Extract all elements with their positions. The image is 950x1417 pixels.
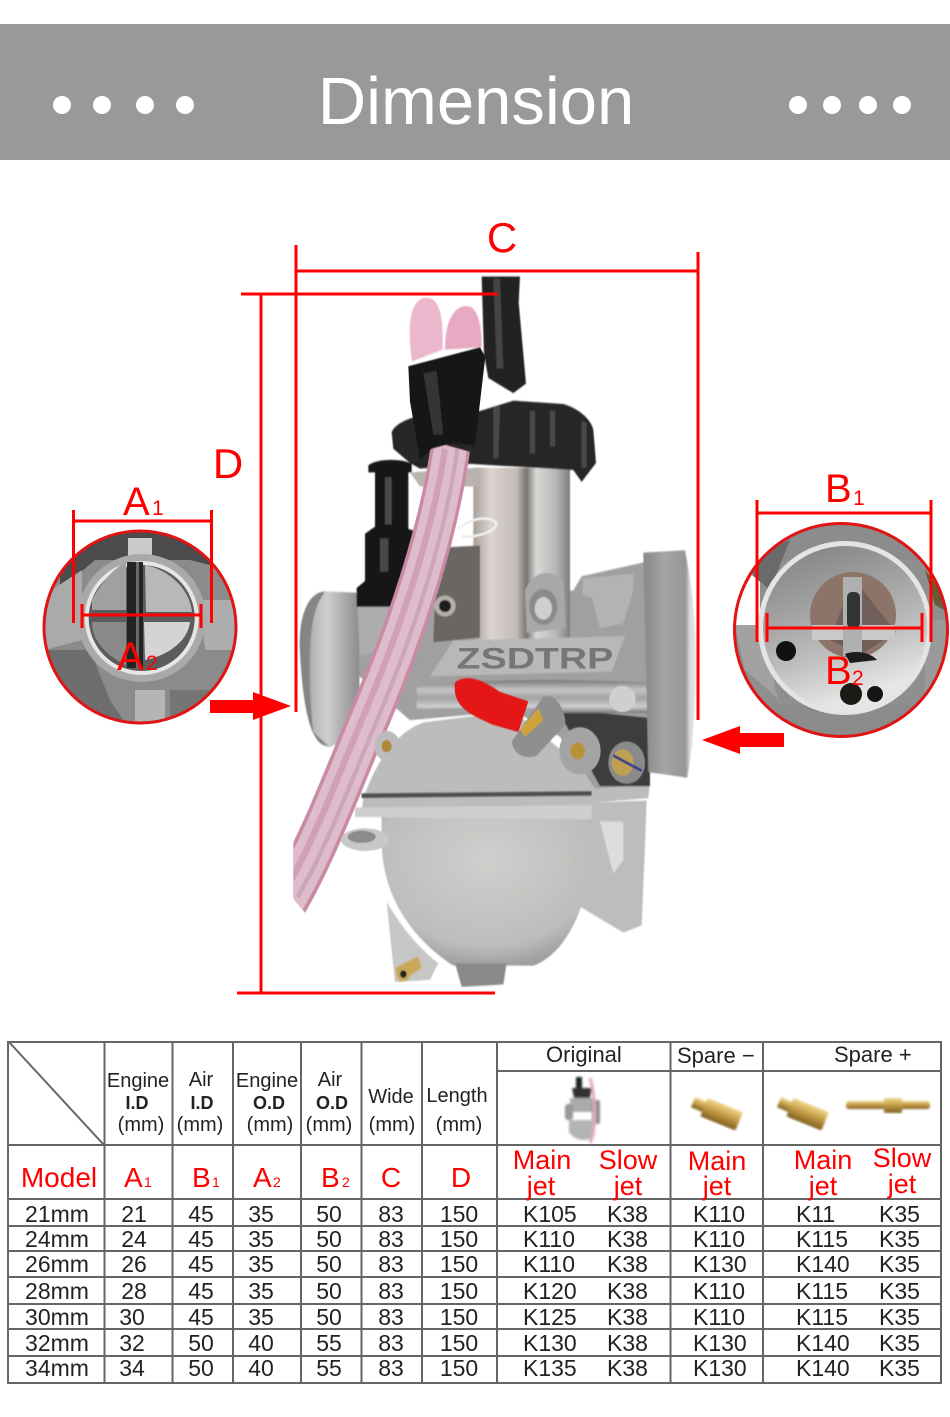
row 28mm: K115 xyxy=(796,1278,848,1304)
row 26mm xyxy=(25,1251,920,1277)
column headers: Air xyxy=(318,1069,343,1091)
row 30mm: 30mm xyxy=(25,1304,89,1330)
red model row: jet xyxy=(887,1169,917,1199)
row 30mm: K125 xyxy=(523,1304,577,1330)
icon: slow jet spare plus xyxy=(846,1098,930,1113)
B1 measure: B xyxy=(825,467,852,511)
row 26mm: 35 xyxy=(248,1251,274,1277)
column lobe xyxy=(525,573,566,633)
red model row: Slow xyxy=(599,1145,658,1175)
row 32mm: 150 xyxy=(440,1330,478,1356)
B1 measure: 1 xyxy=(853,487,865,510)
row 32mm: 32 xyxy=(119,1330,145,1356)
row 34mm xyxy=(25,1355,920,1381)
row 26mm: K140 xyxy=(796,1251,850,1277)
dimension D xyxy=(213,294,498,993)
red cap port xyxy=(512,696,565,757)
row 30mm: 35 xyxy=(248,1304,274,1330)
left arrow xyxy=(210,692,291,720)
bowl bottom nut xyxy=(455,963,507,987)
row 24mm: 50 xyxy=(316,1226,342,1252)
row 34mm: 40 xyxy=(248,1355,274,1381)
row 26mm: K110 xyxy=(523,1251,575,1277)
A2 measure xyxy=(82,604,201,679)
row 21mm: 21mm xyxy=(25,1201,89,1227)
row 26mm: K35 xyxy=(879,1251,920,1277)
row 34mm: 50 xyxy=(188,1355,214,1381)
column headers: (mm) xyxy=(247,1114,293,1136)
screw boss xyxy=(559,727,601,774)
column headers: Engine xyxy=(236,1070,298,1092)
column headers: I.D xyxy=(190,1093,214,1113)
red model row: 1 xyxy=(212,1174,220,1190)
brass nozzle xyxy=(395,956,422,982)
red model row: Main xyxy=(794,1145,852,1175)
row 34mm: K140 xyxy=(796,1355,850,1381)
row 30mm: 45 xyxy=(188,1304,214,1330)
row 28mm: 35 xyxy=(248,1278,274,1304)
row 21mm: K35 xyxy=(879,1201,920,1227)
red model row: B xyxy=(321,1162,340,1193)
table grid xyxy=(8,1041,941,1384)
jet group headers xyxy=(546,1042,912,1068)
row 24mm: K38 xyxy=(607,1226,648,1252)
row 21mm: 45 xyxy=(188,1201,214,1227)
right circle detail: air side xyxy=(730,520,950,742)
row 21mm: 50 xyxy=(316,1201,342,1227)
red model row: C xyxy=(381,1162,401,1193)
row 26mm: 26mm xyxy=(25,1251,89,1277)
row 30mm: K38 xyxy=(607,1304,648,1330)
row 28mm: 28 xyxy=(121,1278,147,1304)
row 32mm: 32mm xyxy=(25,1330,89,1356)
red model row: Slow xyxy=(873,1143,932,1173)
float bowl xyxy=(382,803,592,966)
left circle detail: engine side xyxy=(40,525,240,730)
row 30mm: 30 xyxy=(119,1304,145,1330)
row 21mm xyxy=(25,1201,920,1227)
row 24mm: 24 xyxy=(121,1226,147,1252)
row 34mm: K35 xyxy=(879,1355,920,1381)
row 32mm: K38 xyxy=(607,1330,648,1356)
row 24mm: K110 xyxy=(693,1226,745,1252)
red model row: A xyxy=(253,1162,272,1193)
pink fuel hose xyxy=(285,446,457,897)
row 34mm: 34mm xyxy=(25,1355,89,1381)
A2 measure: A xyxy=(117,635,144,679)
header banner xyxy=(0,24,950,160)
gray flange under knob xyxy=(357,607,397,656)
column headers: Length xyxy=(426,1085,488,1107)
column headers: O.D xyxy=(253,1093,285,1113)
row 34mm: 150 xyxy=(440,1355,478,1381)
B1 measure xyxy=(757,467,931,642)
red model row: Main xyxy=(513,1145,571,1175)
row 30mm xyxy=(25,1304,920,1330)
column headers: (mm) xyxy=(369,1114,415,1136)
A1 measure: A xyxy=(123,480,150,524)
icon: small carburetor xyxy=(565,1077,600,1143)
logo plate xyxy=(430,636,625,676)
row 28mm: 50 xyxy=(316,1278,342,1304)
mix screw xyxy=(608,741,645,784)
A1 measure: 1 xyxy=(152,497,164,520)
column headers: Wide xyxy=(368,1086,414,1108)
row 26mm: 83 xyxy=(378,1251,404,1277)
bowl washer xyxy=(341,828,389,851)
row 21mm: 21 xyxy=(121,1201,147,1227)
red model row: jet xyxy=(613,1171,643,1201)
column headers: O.D xyxy=(316,1093,348,1113)
row 28mm: K38 xyxy=(607,1278,648,1304)
column headers xyxy=(107,1069,488,1136)
A1 measure xyxy=(74,480,212,623)
row 28mm: K120 xyxy=(523,1278,577,1304)
logo text: ZSDTRP xyxy=(457,643,613,676)
red model row: jet xyxy=(526,1171,556,1201)
right nub xyxy=(583,574,633,628)
row 32mm: 83 xyxy=(378,1330,404,1356)
left intake xyxy=(300,591,360,747)
row 26mm: 26 xyxy=(121,1251,147,1277)
left block xyxy=(433,546,480,642)
row 26mm: 45 xyxy=(188,1251,214,1277)
right flange xyxy=(643,550,696,778)
row 21mm: K38 xyxy=(607,1201,648,1227)
red model row: 2 xyxy=(342,1174,350,1190)
right arrow xyxy=(702,726,784,754)
row 34mm: 83 xyxy=(378,1355,404,1381)
row 28mm: K35 xyxy=(879,1278,920,1304)
row 21mm: K11 xyxy=(796,1201,835,1227)
row 24mm: 35 xyxy=(248,1226,274,1252)
row 28mm: K110 xyxy=(693,1278,745,1304)
B2 measure: 2 xyxy=(852,667,864,690)
row 26mm: 150 xyxy=(440,1251,478,1277)
boss left xyxy=(375,731,400,761)
red model row: Main xyxy=(688,1146,746,1176)
row 30mm: K35 xyxy=(879,1304,920,1330)
row 24mm: 83 xyxy=(378,1226,404,1252)
red cap xyxy=(455,678,528,732)
throttle column xyxy=(473,468,570,640)
B2 measure xyxy=(767,613,922,693)
row 28mm: 150 xyxy=(440,1278,478,1304)
specification table xyxy=(8,1041,941,1384)
red model row: jet xyxy=(808,1171,838,1201)
row 21mm: K110 xyxy=(693,1201,745,1227)
right bracket xyxy=(580,800,647,933)
row 32mm: 40 xyxy=(248,1330,274,1356)
dimension C xyxy=(296,214,698,720)
row 34mm: 34 xyxy=(119,1355,145,1381)
row 26mm: K130 xyxy=(693,1251,747,1277)
row 28mm: 28mm xyxy=(25,1278,89,1304)
black cap xyxy=(392,401,596,482)
red model row: 1 xyxy=(144,1174,152,1190)
bowl lower lug xyxy=(387,902,438,982)
row 30mm: K115 xyxy=(796,1304,848,1330)
A2 measure: 2 xyxy=(146,652,158,675)
row 30mm: 50 xyxy=(316,1304,342,1330)
row 32mm xyxy=(25,1330,920,1356)
row 24mm: K35 xyxy=(879,1226,920,1252)
row 34mm: K135 xyxy=(523,1355,577,1381)
right banner dots xyxy=(789,96,911,114)
column headers: (mm) xyxy=(306,1114,352,1136)
row 32mm: 50 xyxy=(188,1330,214,1356)
column headers: Engine xyxy=(107,1070,169,1092)
plug xyxy=(609,686,636,712)
pink tube ends xyxy=(410,298,443,361)
row 32mm: 55 xyxy=(316,1330,342,1356)
red model row: D xyxy=(451,1162,471,1193)
left banner dots xyxy=(53,96,194,114)
row 32mm: K130 xyxy=(693,1330,747,1356)
dimension D: D xyxy=(213,440,243,487)
row 21mm: 150 xyxy=(440,1201,478,1227)
row 24mm xyxy=(25,1226,920,1252)
dimension C: C xyxy=(487,214,517,261)
row 21mm: 83 xyxy=(378,1201,404,1227)
banner title: Dimension xyxy=(318,64,634,139)
column headers: (mm) xyxy=(436,1114,482,1136)
red model row: B xyxy=(192,1162,211,1193)
row 24mm: K110 xyxy=(523,1226,575,1252)
row 32mm: K140 xyxy=(796,1330,850,1356)
row 26mm: 50 xyxy=(316,1251,342,1277)
row 24mm: 24mm xyxy=(25,1226,89,1252)
black boot xyxy=(408,347,485,459)
row 32mm: K35 xyxy=(879,1330,920,1356)
row 26mm: K38 xyxy=(607,1251,648,1277)
column headers: Air xyxy=(189,1069,214,1091)
row 24mm: 45 xyxy=(188,1226,214,1252)
main body xyxy=(357,562,650,789)
column headers: (mm) xyxy=(177,1114,223,1136)
row 28mm xyxy=(25,1278,920,1304)
icon: main jet spare minus xyxy=(689,1093,743,1131)
clip ring xyxy=(458,518,497,537)
bowl cover xyxy=(362,711,650,812)
jet group headers: Spare + xyxy=(834,1042,912,1067)
row 30mm: K110 xyxy=(693,1304,745,1330)
row 24mm: K115 xyxy=(796,1226,848,1252)
red model row: jet xyxy=(702,1171,732,1201)
black knob xyxy=(357,460,417,607)
carburetor illustration xyxy=(285,277,696,987)
row 21mm: 35 xyxy=(248,1201,274,1227)
row 34mm: K38 xyxy=(607,1355,648,1381)
row 34mm: K130 xyxy=(693,1355,747,1381)
red model row xyxy=(21,1143,932,1201)
row 28mm: 83 xyxy=(378,1278,404,1304)
jet group headers: Original xyxy=(546,1042,622,1067)
row 28mm: 45 xyxy=(188,1278,214,1304)
column headers: I.D xyxy=(125,1093,149,1113)
top nipple xyxy=(482,277,526,393)
jet group headers: Spare − xyxy=(677,1043,755,1068)
row 34mm: 55 xyxy=(316,1355,342,1381)
column headers: (mm) xyxy=(118,1114,164,1136)
red model row: 2 xyxy=(273,1174,281,1190)
row 21mm: K105 xyxy=(523,1201,577,1227)
row 24mm: 150 xyxy=(440,1226,478,1252)
red model row: Model xyxy=(21,1162,97,1193)
red model row: A xyxy=(124,1162,143,1193)
row 32mm: K130 xyxy=(523,1330,577,1356)
icon: main jet spare plus xyxy=(775,1093,829,1131)
row 30mm: 83 xyxy=(378,1304,404,1330)
row 30mm: 150 xyxy=(440,1304,478,1330)
B2 measure: B xyxy=(825,649,852,693)
